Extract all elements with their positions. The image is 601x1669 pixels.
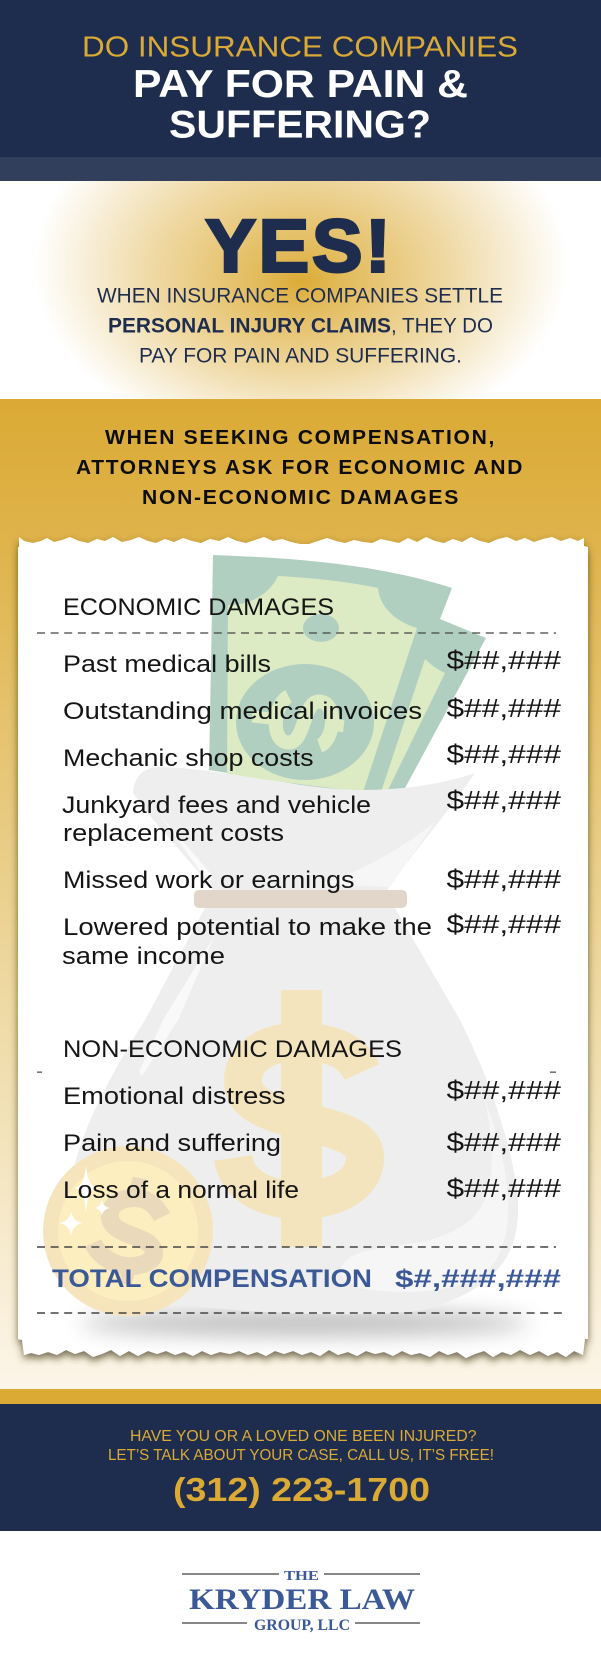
answer text [97,284,503,368]
line items [62,651,432,970]
yes heading: YES! [206,204,394,288]
phone number: (312) 223-1700 [173,1471,430,1508]
illustration: money bag with cash and coin [43,555,530,1336]
icon: bag tie [194,890,407,908]
amounts: $##,### [446,1173,562,1203]
total compensation: $#,###,### [395,1265,561,1293]
amounts: $##,### [446,693,562,723]
line items: Pain and suffering [63,1130,281,1157]
icon: sparkles [59,1165,110,1236]
line items: Lowered potential to make the [63,914,432,941]
section heading: NON-ECONOMIC DAMAGES [142,487,460,509]
answer text: PERSONAL INJURY CLAIMS [108,314,391,338]
section heading: ATTORNEYS ASK FOR ECONOMIC AND [76,457,524,479]
title: DO INSURANCE COMPANIES [82,32,518,64]
line items: Past medical bills [63,651,271,678]
title: SUFFERING? [169,104,431,146]
line items: Emotional distress [63,1083,286,1110]
section heading: WHEN SEEKING COMPENSATION, [105,427,496,449]
line items: Missed work or earnings [63,867,354,894]
line items: Mechanic shop costs [63,745,314,772]
icon: cash bills [209,555,486,795]
icon: large dollar sign [233,990,365,1247]
logo: the kryder law group: GROUP, LLC [254,1617,350,1634]
heading: economic damages: ECONOMIC DAMAGES [63,594,334,621]
panel: non-economic damages [37,1036,562,1204]
line items: same income [62,943,225,970]
line items: Loss of a normal life [63,1177,299,1204]
logo: the kryder law group: KRYDER LAW [189,1583,415,1616]
header panel [0,0,601,181]
amounts [446,1075,562,1203]
amounts: $##,### [446,1075,562,1105]
gold divider band [0,1389,601,1404]
answer text: , THEY DO [391,314,493,338]
logo: the kryder law group: THE [284,1569,319,1584]
icon: bag body [70,908,518,1314]
amounts: $##,### [446,739,562,769]
call to action text: LET’S TALK ABOUT YOUR CASE, CALL US, IT’S FREE! [108,1447,494,1464]
title: PAY FOR PAIN & [133,63,468,106]
line items: replacement costs [63,820,284,847]
title [82,32,518,146]
icon: dollar on bill [250,693,346,748]
amounts: $##,### [446,785,562,815]
logo: the kryder law group [182,1569,420,1634]
answer text: WHEN INSURANCE COMPANIES SETTLE [97,284,503,308]
answer text: PAY FOR PAIN AND SUFFERING. [139,344,462,368]
panel: damages background [0,399,601,1389]
panel: economic damages [37,594,562,970]
call to action text [108,1428,494,1464]
line items: Junkyard fees and vehicle [62,792,371,819]
total compensation: TOTAL COMPENSATION [52,1265,372,1293]
golden glow [45,181,558,399]
amounts: $##,### [446,909,562,939]
receipt paper [18,537,588,1358]
heading: non-economic damages: NON-ECONOMIC DAMAGES [63,1036,402,1063]
icon: gold coin [43,1146,213,1316]
call to action text: HAVE YOU OR A LOVED ONE BEEN INJURED? [130,1428,477,1445]
bag shadow [80,1310,530,1336]
panel: call to action [0,1404,601,1531]
amounts: $##,### [446,645,562,675]
amounts [446,645,562,939]
section heading [76,427,524,509]
total compensation [37,1247,563,1313]
panel: yes answer [45,181,558,399]
icon: bag neck [133,767,475,890]
amounts: $##,### [446,864,562,894]
line items [63,1083,299,1204]
amounts: $##,### [446,1127,562,1157]
line items: Outstanding medical invoices [63,698,422,725]
panel: footer logo [0,1531,601,1669]
